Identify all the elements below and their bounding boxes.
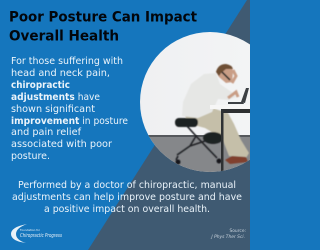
shirt [182,73,236,118]
title: Poor Posture Can Impact [9,10,197,26]
body text: first paragraph: head and neck pain, [11,68,110,79]
hair [216,64,233,76]
shoe [225,156,248,164]
source note [210,228,246,240]
body text: first paragraph: For those suffering with [11,56,123,67]
body text: first paragraph: improvement in posture [11,116,128,127]
chair frame [176,125,217,160]
photo: man at desk with poor posture [140,32,250,172]
body text: first paragraph [11,56,128,162]
source note: J Phys Ther Sci. [210,234,245,240]
body text: first paragraph: associated with poor [11,139,112,150]
glasses [222,72,230,80]
head [216,68,234,84]
logo: Foundation for Chiropractic Progress: Foundation for [20,228,41,232]
source note: Source: [229,228,246,234]
body text: first paragraph: chiropractic [11,80,70,91]
body text: first paragraph: adjustments have [11,92,100,103]
body text: first paragraph: shown significant [11,104,95,115]
body text: second paragraph: Performed by a doctor of chiropractic, manual [18,180,236,191]
logo: Foundation for Chiropractic Progress: Chiropractic Progress [20,233,62,239]
chair knee pad [203,132,223,144]
arm and hand [228,70,238,98]
title [9,10,197,44]
desk [210,105,217,109]
body text: second paragraph: adjustments can help improve posture and have [12,192,242,203]
laptop [228,88,249,104]
body text: second paragraph [12,180,242,215]
background [0,0,250,250]
logo: Foundation for Chiropractic Progress [11,224,62,243]
body text: first paragraph: and pain relief [11,127,82,138]
chair wheels [176,160,180,164]
trousers [183,108,249,158]
body text: first paragraph: posture. [11,151,50,162]
title: Overall Health [9,28,119,44]
body text: second paragraph: a positive impact on overall health. [44,204,210,215]
chair seat [175,118,198,127]
diagonal slate panel [88,0,250,250]
